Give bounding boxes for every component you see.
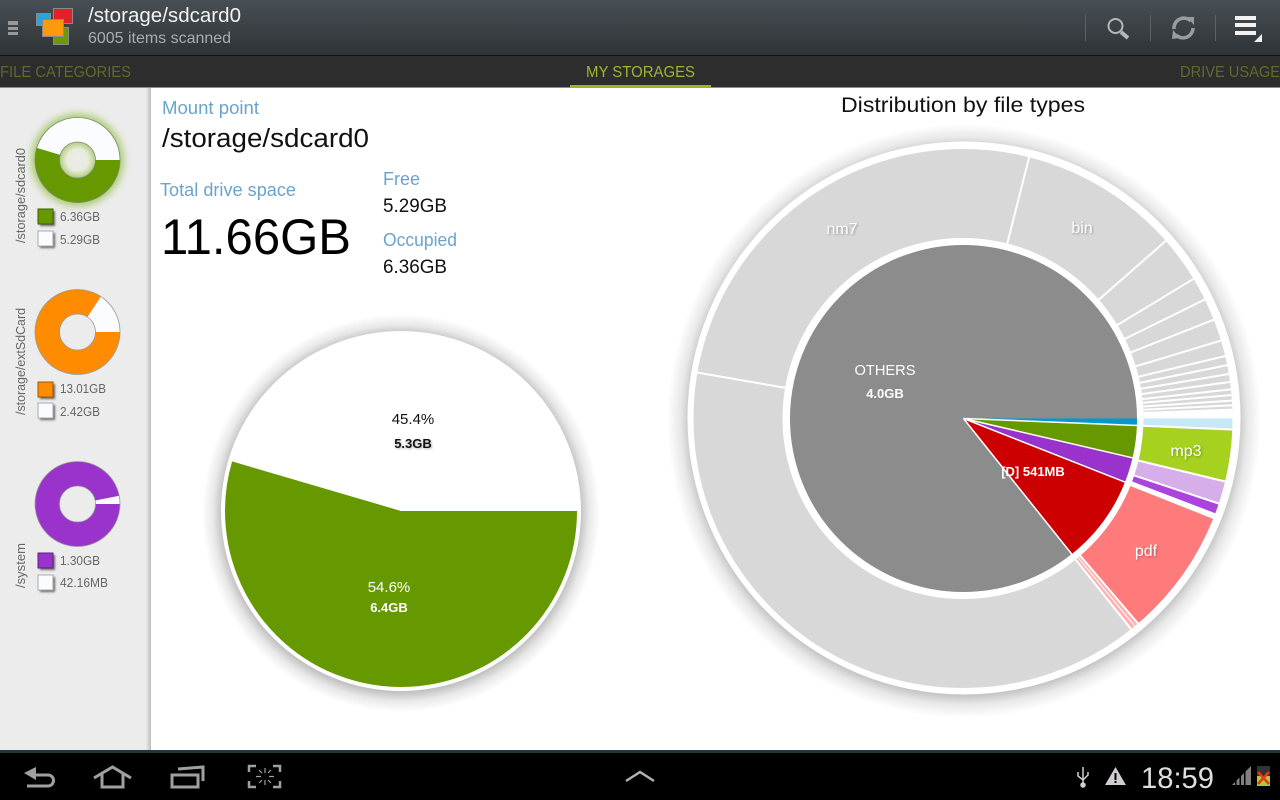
inner pie separators [964, 418, 1138, 555]
icon: usb [1078, 767, 1088, 787]
icon: battery [1257, 766, 1270, 786]
legend: sdcard0 [38, 209, 100, 248]
free value: 5.29GB [383, 196, 447, 217]
label: nm7: nm7 [826, 221, 858, 238]
label: bin: bin [1071, 220, 1093, 237]
icon: menu [1235, 16, 1262, 42]
legend: extSdCard: 2.42GB [60, 404, 100, 419]
mount point label: Mount point [162, 98, 259, 118]
donut: system [35, 462, 120, 546]
legend: sdcard0: 5.29GB [60, 232, 100, 247]
free label: Free [383, 169, 420, 189]
occupied size: 6.4GB [370, 600, 408, 615]
tab: file categories: FILE CATEGORIES [0, 64, 131, 81]
action bar [0, 0, 1280, 56]
header title: /storage/sdcard0 [88, 5, 241, 27]
free size: 5.3GB [394, 436, 432, 451]
occupied percentage: 54.6% [368, 579, 410, 596]
icon: recents [172, 767, 203, 787]
icon: back [24, 767, 54, 786]
label: others: OTHERS [854, 362, 916, 379]
label: mp3: mp3 [1170, 443, 1202, 460]
label: extSdCard: /storage/extSdCard [13, 308, 28, 415]
legend: system: 42.16MB [60, 575, 108, 590]
outer ring: file extensions [646, 101, 1280, 736]
icon: app logo [36, 8, 72, 44]
tab bar [0, 56, 1280, 88]
chart: drive usage pie [202, 314, 600, 712]
occupied value: 6.36GB [383, 257, 447, 278]
panel: drive info [160, 98, 457, 278]
action separators [1085, 15, 1216, 41]
chart title: Distribution by file types [841, 94, 1085, 117]
inner pie: categories [851, 306, 1076, 531]
legend: extSdCard: 13.01GB [60, 381, 106, 396]
label: system: /system [13, 543, 28, 588]
legend: system: 1.30GB [60, 553, 100, 568]
icon: refresh [1172, 17, 1194, 39]
chart: file type sunburst [646, 101, 1280, 736]
label: pdf: pdf [1135, 543, 1158, 560]
icon: chevron up [626, 772, 654, 781]
legend: system [38, 553, 108, 592]
total space value: 11.66GB [161, 209, 351, 265]
icon: overflow handle [8, 21, 18, 35]
mount point value: /storage/sdcard0 [162, 125, 369, 153]
legend: extSdCard [38, 381, 106, 420]
icon: search [1108, 19, 1128, 38]
outer ring separators [694, 154, 1236, 632]
total space label: Total drive space [160, 180, 296, 200]
clock: 18:59 [1141, 762, 1214, 795]
label: highlighted slice: [D] 541MB [1001, 464, 1065, 479]
legend: sdcard0: 6.36GB [60, 209, 100, 224]
icon: home [94, 767, 131, 787]
active tab underline [570, 85, 711, 88]
icon: signal [1232, 766, 1251, 785]
icon: warning [1105, 767, 1126, 785]
label: sdcard0: /storage/sdcard0 [13, 148, 28, 243]
donut: sdcard0 [32, 114, 124, 206]
icon: screenshot [249, 766, 280, 787]
header subtitle: 6005 items scanned [88, 30, 231, 47]
system navigation bar [0, 750, 1280, 800]
occupied label: Occupied [383, 230, 457, 250]
tab: my storages: MY STORAGES [586, 64, 695, 81]
free percentage: 45.4% [392, 411, 434, 428]
donut: extSdCard [35, 290, 120, 374]
label: others size: 4.0GB [866, 386, 904, 401]
panel: sidebar [0, 88, 151, 750]
